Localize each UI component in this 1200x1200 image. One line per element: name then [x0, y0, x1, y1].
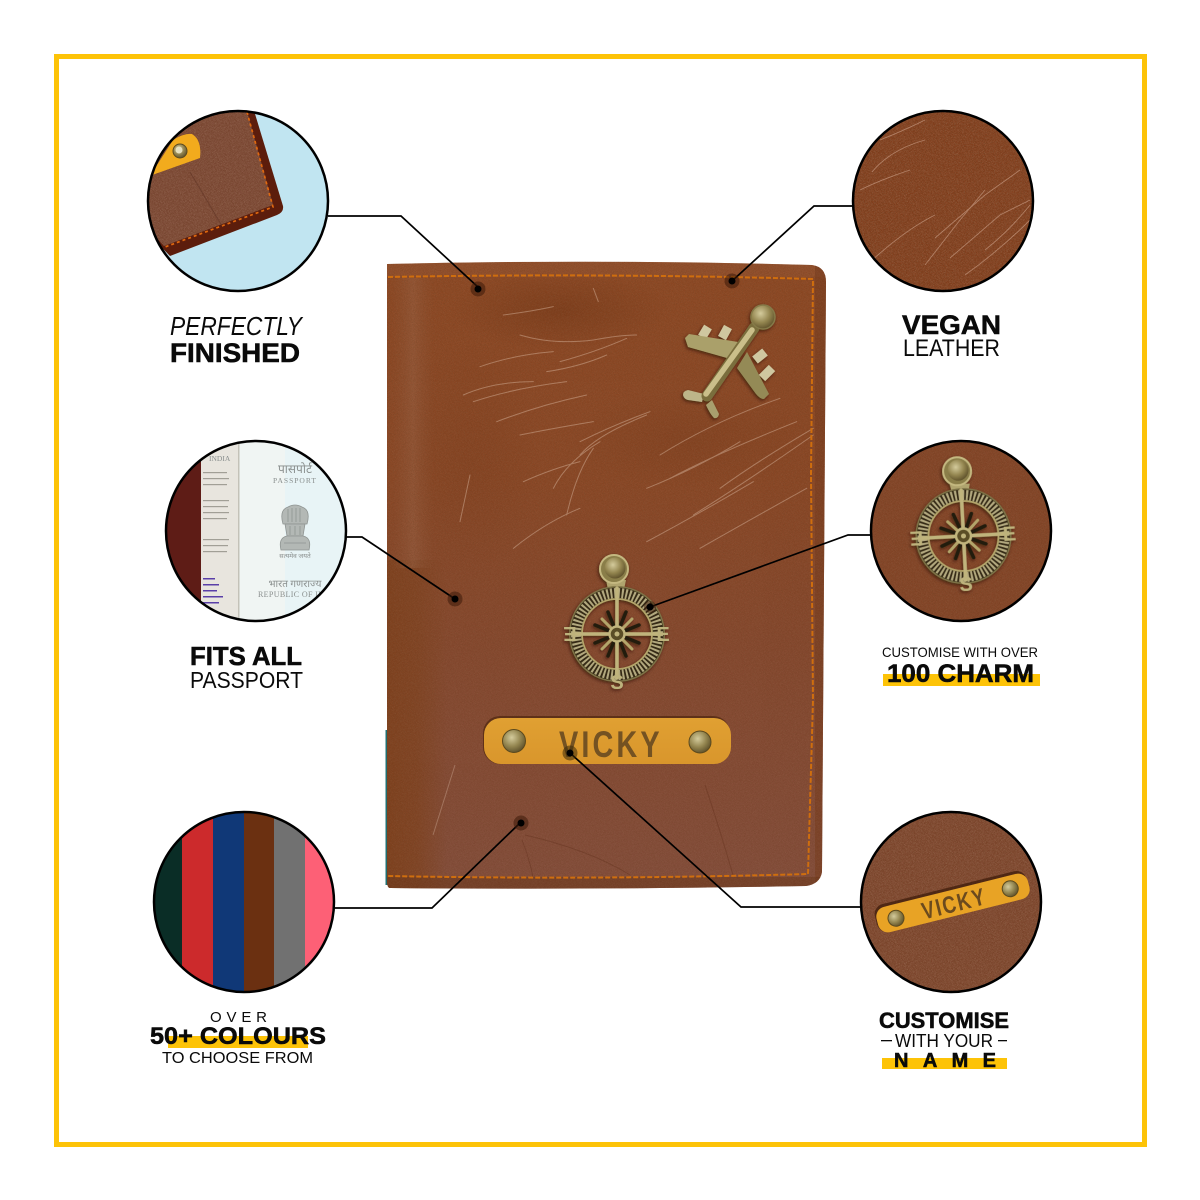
- circle: perfectly finished corner detail: [146, 110, 330, 292]
- circle: colour stripes: [154, 812, 335, 992]
- label: vegan leather: VEGAN: [902, 310, 1001, 340]
- compass cross: [573, 588, 661, 678]
- tag: VICKY: [919, 883, 988, 925]
- compass letters: E: [656, 624, 670, 646]
- label: customise with your name: NAME: [894, 1050, 996, 1072]
- rivets: [502, 730, 526, 752]
- label: customise with your name: [879, 1008, 1009, 1072]
- name tag: [483, 716, 731, 766]
- label: fits all passport: [190, 641, 303, 693]
- teal inner sliver: [386, 730, 388, 885]
- passport title: पासपोर्ट: [278, 462, 313, 476]
- circle: name tag: [861, 812, 1041, 992]
- label: customise with over 100 charm: [882, 644, 1040, 688]
- label: fits all passport: PASSPORT: [190, 667, 303, 693]
- label: vegan leather: [902, 310, 1001, 362]
- connector dots: [448, 274, 740, 830]
- label: perfectly finished: FINISHED: [170, 338, 300, 368]
- compass loop: [606, 580, 626, 594]
- charm: [906, 454, 1019, 599]
- stitching: [388, 275, 813, 878]
- name text: VICKY: [559, 725, 660, 766]
- label: over 50+ colours: TO CHOOSE FROM: [162, 1050, 313, 1067]
- stamp ink: [203, 578, 223, 604]
- charm: airplane: [683, 305, 775, 418]
- page text lines: [203, 454, 231, 552]
- label: customise with your name: WITH YOUR: [895, 1031, 993, 1051]
- compass letters: S: [610, 672, 624, 694]
- nose cap: [751, 305, 775, 329]
- label: vegan leather: LEATHER: [903, 335, 1000, 362]
- engines: [702, 327, 772, 378]
- page text lines: INDIA: [209, 454, 231, 463]
- circle: compass charm: [871, 441, 1051, 621]
- charm: E: [1002, 523, 1017, 546]
- label: fits all passport: FITS ALL: [190, 641, 302, 671]
- leather strip: [167, 461, 201, 601]
- compass letters: E: [563, 622, 577, 644]
- circle: vegan leather swatch: [853, 111, 1033, 291]
- leather corner: [158, 112, 284, 256]
- yellow tag: [150, 134, 200, 176]
- tag: [874, 871, 1030, 932]
- label: customise with your name: CUSTOMISE: [879, 1008, 1009, 1033]
- fuselage: [707, 328, 754, 396]
- circle: passport pages: PASSPORT: [273, 476, 317, 485]
- label: customise with over 100 charm: 100 CHARM: [887, 660, 1034, 688]
- republic of india: भारत गणराज्य: [269, 579, 322, 590]
- connector lines: [328, 206, 871, 908]
- passport cover product: [385, 258, 830, 892]
- leather cover: [385, 258, 830, 892]
- label: over 50+ colours: 50+ COLOURS: [150, 1023, 326, 1050]
- compass ring: [570, 587, 664, 681]
- label: customise with over 100 charm: CUSTOMISE WITH OVER: [882, 644, 1038, 660]
- compass letters: [563, 622, 670, 694]
- charm: S: [959, 574, 973, 596]
- tail: [683, 390, 704, 402]
- wings: [685, 334, 738, 358]
- label: perfectly finished: [170, 311, 303, 368]
- label: perfectly finished: PERFECTLY: [170, 311, 303, 341]
- circle: passport pages: [160, 441, 350, 621]
- emblem: [280, 505, 310, 550]
- charm: compass: [563, 555, 670, 694]
- charm: E: [909, 526, 924, 549]
- label: over 50+ colours: [150, 1009, 326, 1067]
- compass star: [595, 612, 639, 656]
- label: over 50+ colours: OVER: [210, 1009, 267, 1026]
- inner page: [201, 441, 238, 621]
- circle: passport pages: REPUBLIC OF IN: [258, 590, 324, 599]
- motto: सत्यमेव जयते: [279, 552, 311, 560]
